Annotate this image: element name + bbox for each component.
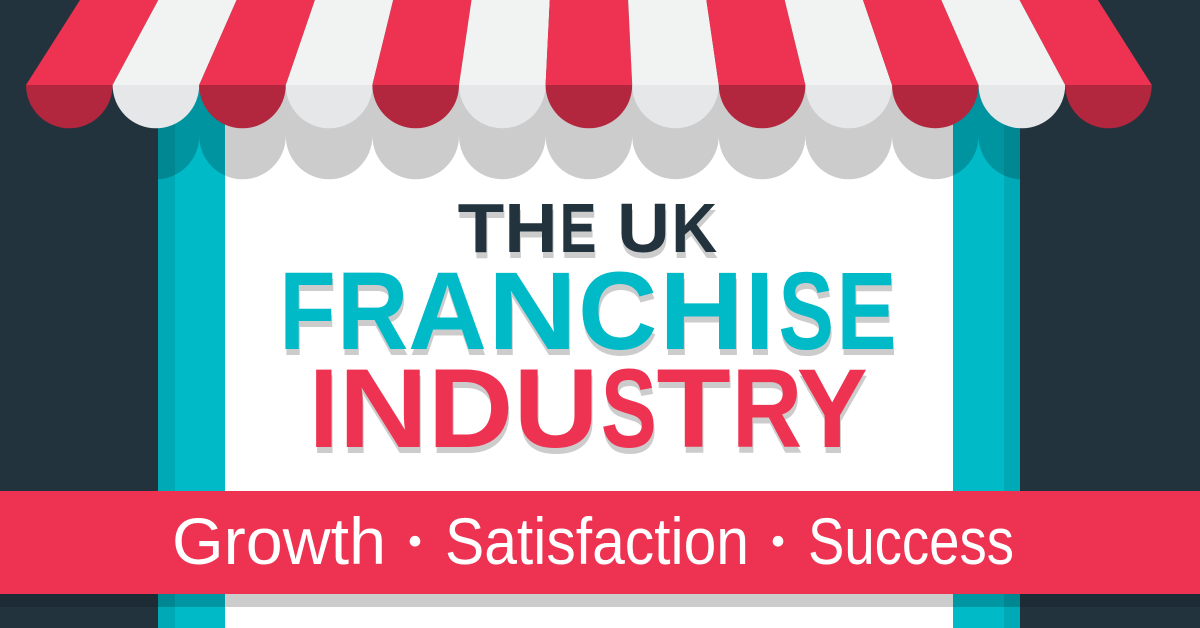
- title line: THE UK: U: [618, 195, 671, 273]
- title line: INDUSTRY: T: [657, 352, 732, 477]
- title line: FRANCHISE: A: [409, 256, 488, 379]
- title line: INDUSTRY: D: [429, 352, 514, 477]
- title line: INDUSTRY: [309, 346, 869, 477]
- title line: THE UK: H: [504, 189, 558, 267]
- tagline: ·: [763, 492, 793, 591]
- title line: FRANCHISE: I: [746, 256, 775, 379]
- title line: FRANCHISE: C: [579, 256, 658, 379]
- title line: INDUSTRY: N: [338, 346, 428, 471]
- title line: INDUSTRY: R: [732, 346, 802, 471]
- awning: [26, 0, 1152, 128]
- title line: THE UK: K: [672, 189, 717, 267]
- shopfront: [158, 85, 1020, 628]
- title line: INDUSTRY: R: [733, 352, 803, 477]
- awning scallops: [26, 85, 1152, 128]
- title line: FRANCHISE: E: [838, 256, 898, 379]
- title line: FRANCHISE: F: [280, 256, 337, 379]
- title line: INDUSTRY: I: [309, 346, 339, 471]
- banner shadow: [0, 594, 1200, 607]
- title line: INDUSTRY: I: [310, 352, 340, 477]
- title line: INDUSTRY: U: [515, 352, 600, 477]
- title line: FRANCHISE: S: [778, 250, 834, 373]
- title line: FRANCHISE: F: [279, 250, 336, 373]
- title line: THE UK: E: [560, 189, 596, 267]
- title line: FRANCHISE: S: [780, 256, 835, 379]
- right teal column: [953, 85, 1020, 628]
- title line: THE UK: E: [561, 195, 598, 273]
- title line: INDUSTRY: S: [601, 346, 657, 471]
- title line: INDUSTRY: S: [602, 352, 658, 477]
- title line: THE UK: T: [458, 189, 504, 267]
- white shop window: [225, 85, 953, 628]
- title line: FRANCHISE: I: [745, 250, 774, 373]
- awning shadow: [158, 85, 1020, 179]
- awning stripes: [26, 0, 1152, 85]
- tagline: Growth: [172, 504, 386, 578]
- title line: FRANCHISE: R: [338, 256, 410, 379]
- title line: THE UK: U: [617, 189, 670, 267]
- title line: FRANCHISE: E: [836, 250, 896, 373]
- tagline: ·: [400, 492, 430, 591]
- title line: FRANCHISE: N: [489, 256, 578, 379]
- title line: INDUSTRY: Y: [797, 346, 868, 471]
- banner: [0, 491, 1200, 594]
- title: [279, 189, 898, 477]
- title line: FRANCHISE: H: [659, 250, 744, 373]
- title line: THE UK: [458, 189, 718, 273]
- left teal column: [158, 85, 225, 628]
- title line: FRANCHISE: H: [660, 256, 745, 379]
- title line: FRANCHISE: C: [578, 250, 657, 373]
- title line: INDUSTRY: U: [514, 346, 599, 471]
- title line: INDUSTRY: T: [656, 346, 731, 471]
- title line: THE UK: H: [505, 195, 559, 273]
- title line: INDUSTRY: D: [428, 346, 513, 471]
- title line: THE UK: T: [459, 195, 505, 273]
- title line: FRANCHISE: A: [408, 250, 487, 373]
- tagline: [172, 492, 1014, 591]
- tagline: Satisfaction: [445, 504, 749, 578]
- title line: FRANCHISE: R: [337, 250, 408, 373]
- title line: FRANCHISE: [279, 250, 898, 379]
- title line: INDUSTRY: Y: [798, 352, 869, 477]
- title line: THE UK: K: [672, 195, 718, 273]
- tagline: Success: [808, 504, 1014, 578]
- title line: INDUSTRY: N: [340, 352, 429, 477]
- title line: FRANCHISE: N: [488, 250, 577, 373]
